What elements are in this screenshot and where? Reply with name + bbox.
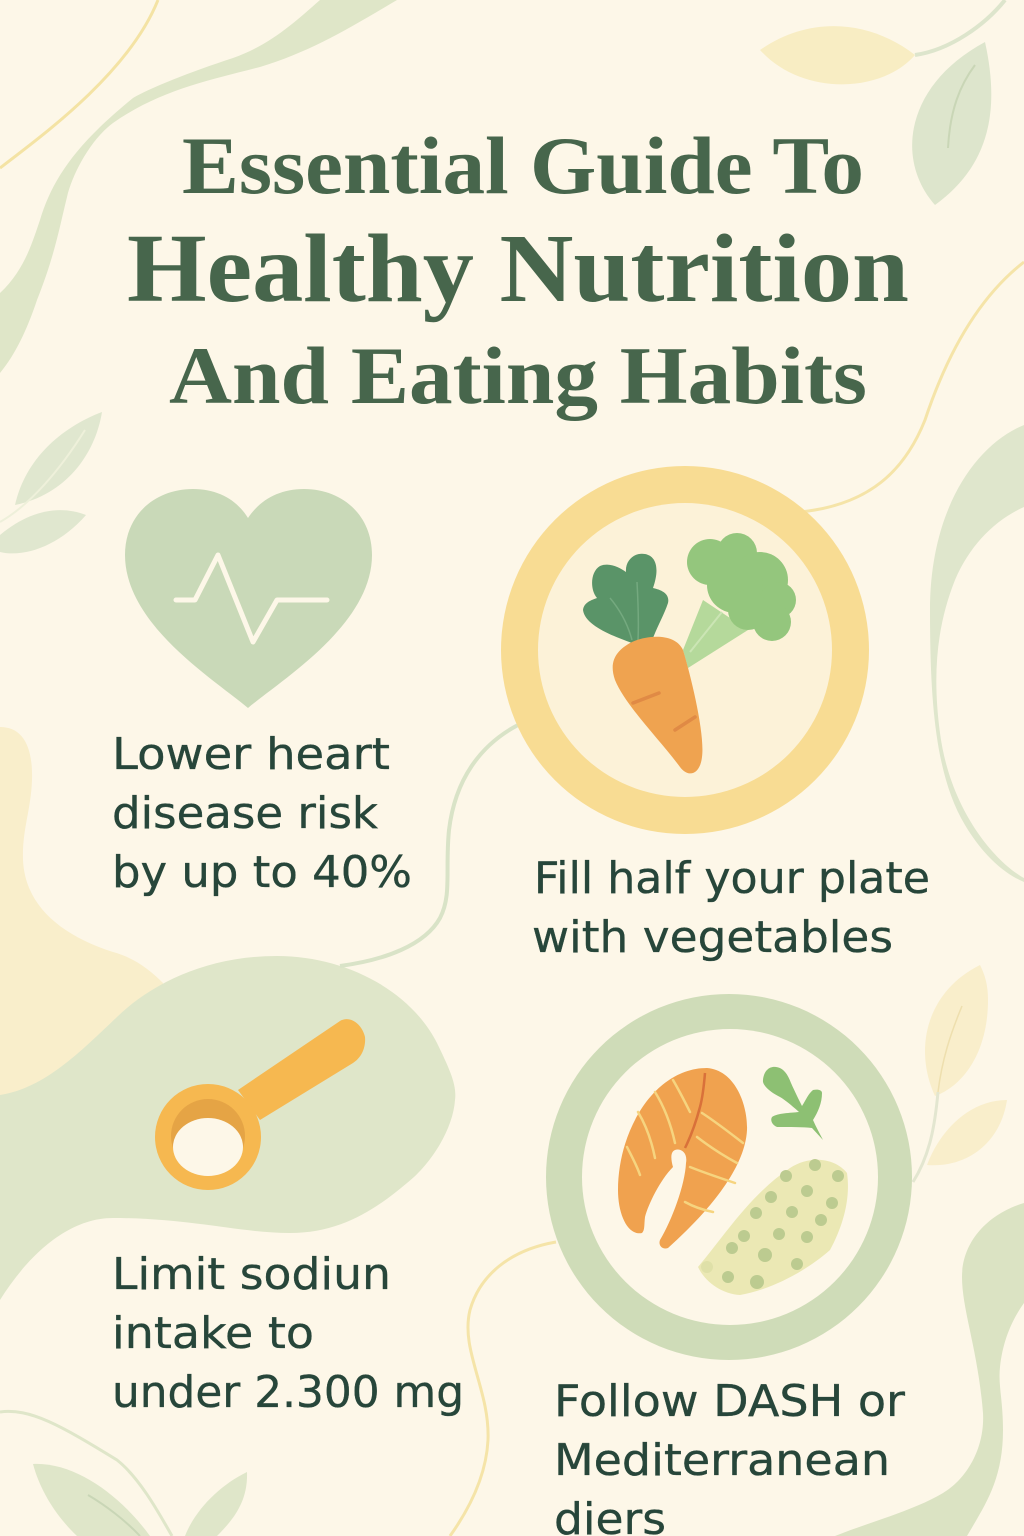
background: left leaves (0, 412, 102, 553)
title: And Eating Habits (169, 330, 867, 421)
icon: plate with carrot and broccoli (501, 466, 869, 834)
background: top-left swoosh (0, 0, 397, 373)
text: heart disease risk: by up to 40% (112, 847, 412, 898)
text: fill half your plate: Fill half your plate (534, 853, 930, 904)
text: heart disease risk: disease risk (112, 788, 379, 839)
text: heart disease risk (112, 729, 412, 898)
text: follow DASH: Mediterranean (554, 1435, 890, 1486)
text: follow DASH (554, 1376, 906, 1536)
text: limit sodium: intake to (112, 1308, 314, 1359)
text: heart disease risk: Lower heart (112, 729, 390, 780)
icon: grains (698, 1159, 848, 1295)
title (127, 120, 909, 421)
text: follow DASH: Follow DASH or (554, 1376, 906, 1427)
background: right lower leaves (835, 965, 1024, 1536)
background: yellow connector line (450, 1242, 556, 1536)
title: Healthy Nutrition (127, 215, 909, 323)
background: right wavy line and shape (800, 262, 1024, 882)
background: top-right leaves (760, 0, 1005, 205)
background: bottom-left leaves (0, 1411, 247, 1536)
text: limit sodium (112, 1249, 464, 1418)
icon: carrot (613, 637, 702, 773)
icon: salmon (618, 1068, 747, 1248)
icon: plate with salmon and grains (546, 994, 912, 1360)
icon: carrot leaves (583, 554, 668, 643)
text: fill half your plate: with vegetables (532, 912, 893, 963)
background: left yellow blob (0, 727, 200, 1100)
icon: broccoli (683, 533, 796, 668)
background: green connecting line (340, 725, 518, 966)
icon: green herb (763, 1067, 823, 1140)
icon: measuring spoon (155, 1019, 365, 1190)
icon: heart with pulse (125, 489, 372, 708)
text: limit sodium: under 2.300 mg (112, 1367, 464, 1418)
text: fill half your plate (532, 853, 930, 963)
background: large green blob (0, 956, 455, 1300)
title: Essential Guide To (182, 120, 864, 211)
text: limit sodium: Limit sodiun (112, 1249, 391, 1300)
